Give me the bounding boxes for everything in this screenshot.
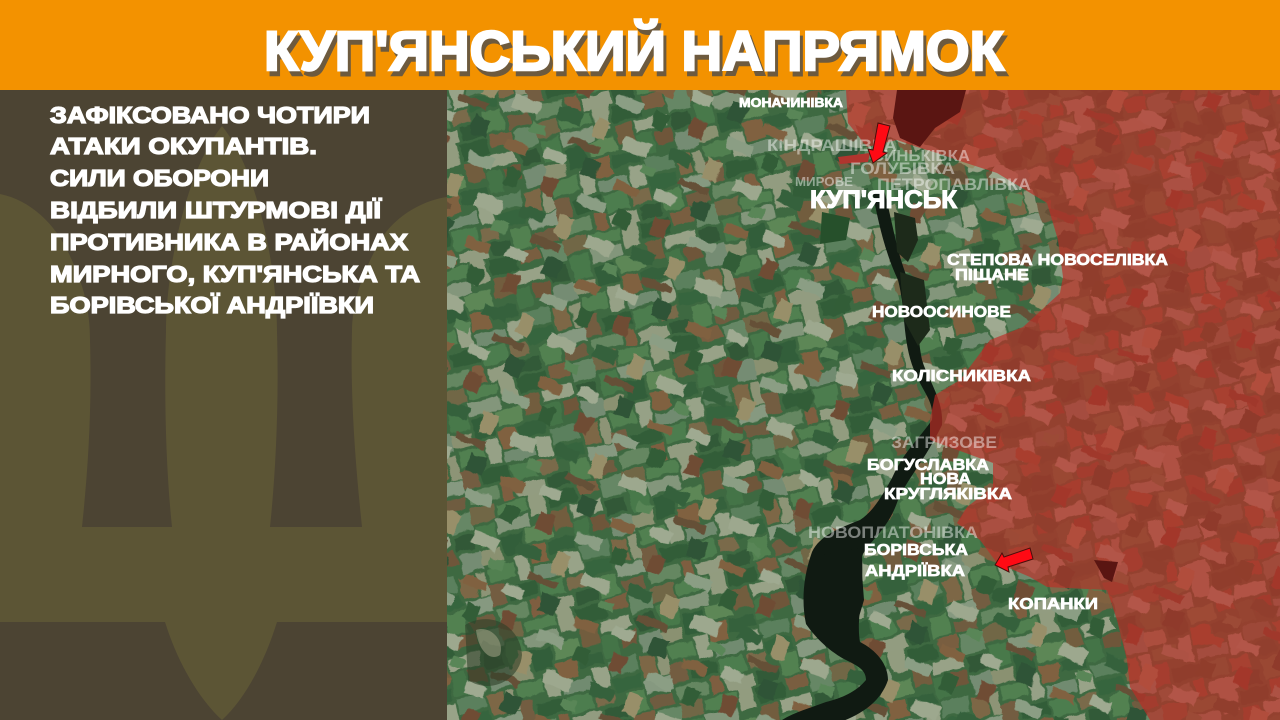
labels: settlements: АНДРІЇВКА bbox=[865, 562, 966, 580]
chart: satellite map of the Kupiansk direction bbox=[430, 70, 1280, 720]
text block: attack summary: ВІДБИЛИ ШТУРМОВІ ДІЇ bbox=[50, 197, 382, 223]
text block: attack summary bbox=[50, 102, 420, 318]
labels: settlements: КУП'ЯНСЬК bbox=[810, 186, 958, 214]
labels: settlements: ЗАГРИЗОВЕ bbox=[891, 433, 997, 452]
text block: attack summary: ПРОТИВНИКА В РАЙОНАХ bbox=[50, 228, 409, 255]
labels: settlements: СТЕПОВА НОВОСЕЛІВКА bbox=[947, 252, 1168, 269]
title: КУП'ЯНСЬКИЙ НАПРЯМОК bbox=[267, 24, 1008, 87]
arrow: attack near Borivska Andriivka bbox=[995, 548, 1033, 572]
text block: attack summary: МИРНОГО, КУП'ЯНСЬКА ТА bbox=[50, 261, 420, 287]
text block: attack summary: БОРІВСЬКОЇ АНДРІЇВКИ bbox=[50, 292, 374, 318]
labels: settlements: МОНАЧИНІВКА bbox=[739, 96, 843, 110]
map: river and forests bbox=[465, 190, 942, 720]
labels: settlements: КОЛІСНИКІВКА bbox=[892, 368, 1032, 385]
map: occupied territory overlay bbox=[846, 90, 1280, 720]
panel: left info panel bbox=[0, 90, 447, 720]
icon: trident emblem watermark bbox=[0, 126, 447, 720]
text block: attack summary: АТАКИ ОКУПАНТІВ. bbox=[50, 133, 317, 159]
arrow: attack near Kupiansk bbox=[868, 123, 890, 163]
labels: settlements: НОВА bbox=[920, 471, 971, 488]
labels: settlements: КІНДРАШІВКА bbox=[767, 136, 897, 155]
labels: settlements: СИНЬКІВКА bbox=[872, 148, 970, 165]
labels: settlements: ПЕТРОПАВЛІВКА bbox=[877, 175, 1031, 194]
labels: settlements: ПІЩАНЕ bbox=[955, 267, 1029, 284]
labels: settlements: ГОЛУБІВКА bbox=[850, 159, 955, 178]
labels: settlements: КОПАНКИ bbox=[1008, 596, 1098, 613]
labels: settlements: БОРІВСЬКА bbox=[864, 542, 968, 559]
title: КУП'ЯНСЬКИЙ НАПРЯМОК bbox=[264, 19, 1005, 82]
labels: settlements: БОГУСЛАВКА bbox=[867, 457, 989, 474]
map: farmland fields bbox=[430, 70, 1280, 720]
header: orange title bar bbox=[0, 0, 1280, 90]
text block: attack summary: СИЛИ ОБОРОНИ bbox=[50, 165, 269, 191]
labels: settlements: НОВООСИНОВЕ bbox=[872, 304, 1011, 321]
labels: settlements: МИРОВЕ bbox=[795, 174, 853, 189]
labels: settlements: НОВОПЛАТОНІВКА bbox=[808, 523, 978, 542]
map: dark forest inside occupied zone bbox=[838, 90, 1118, 582]
map: muted green tone bbox=[447, 90, 1280, 720]
labels: settlements bbox=[739, 96, 1168, 613]
labels: settlements: КРУГЛЯКІВКА bbox=[884, 486, 1013, 503]
text block: attack summary: ЗАФІКСОВАНО ЧОТИРИ bbox=[50, 102, 370, 128]
